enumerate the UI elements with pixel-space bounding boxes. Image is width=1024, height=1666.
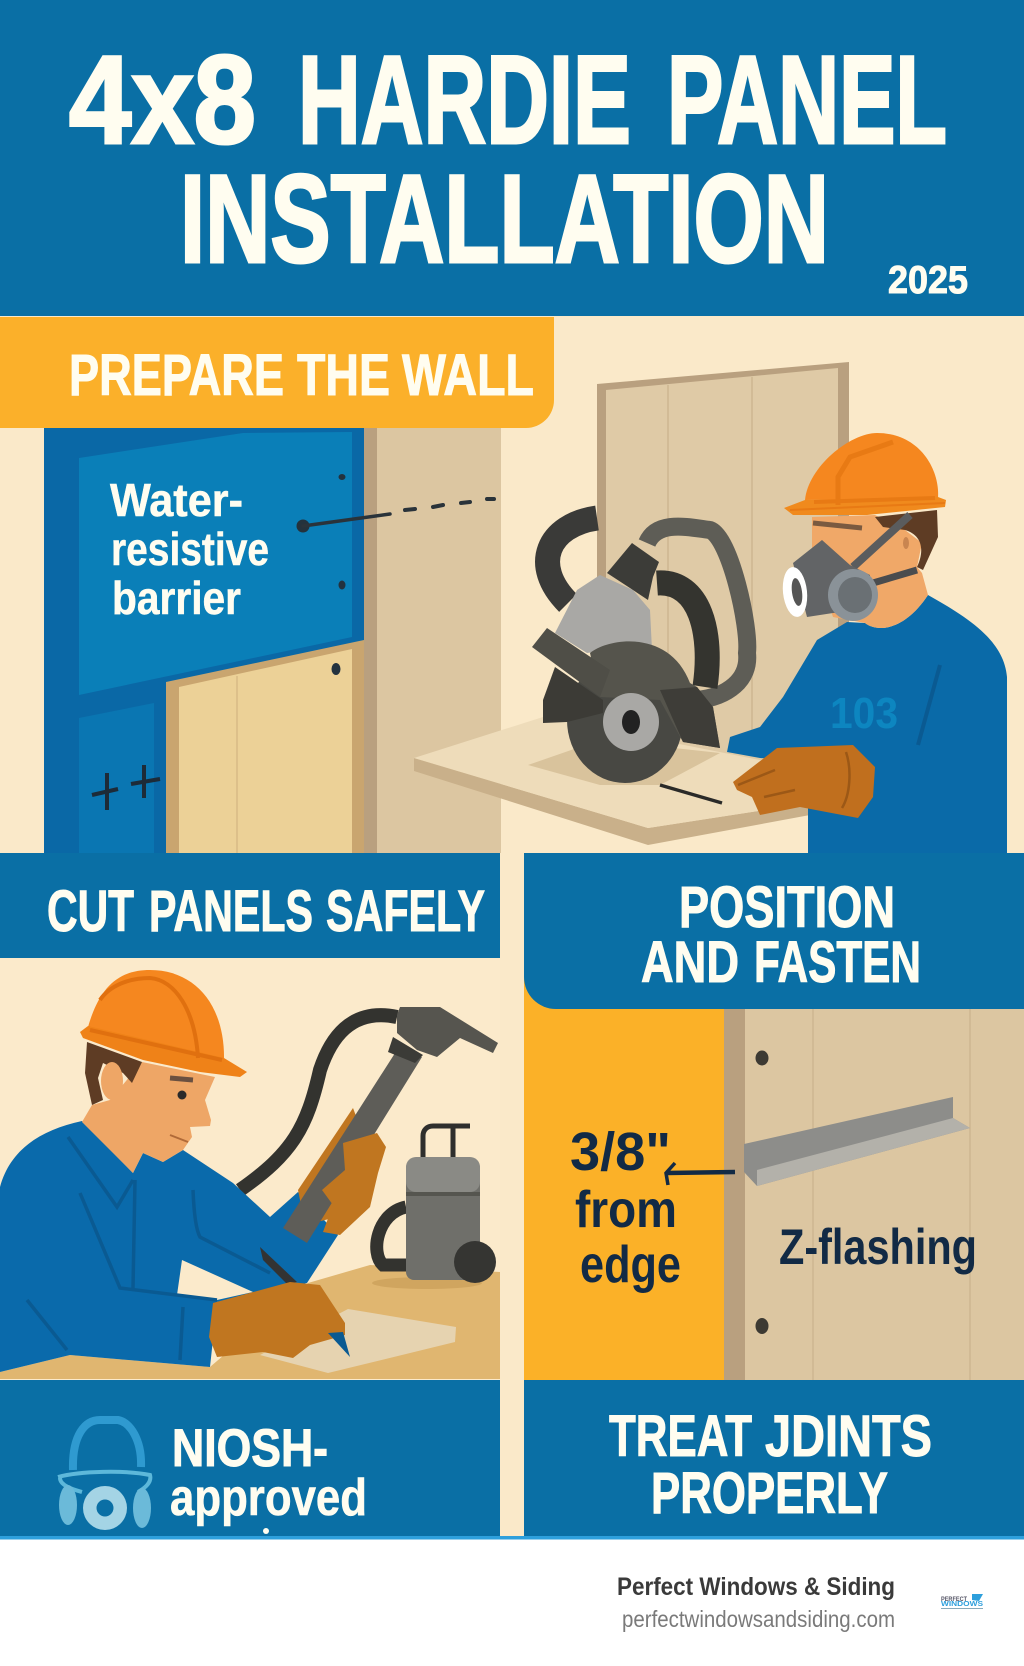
step heading: position and fasten: POSITION (679, 875, 895, 940)
barrier label: barrier (112, 572, 241, 624)
step heading: cut panels safely: SAFELY (326, 879, 485, 944)
step heading: cut panels safely (0, 853, 500, 958)
step heading: cut panels safely: CUT (47, 879, 134, 944)
icon: logo: PERFECT (941, 1597, 967, 1603)
panel: position and fasten illustration (524, 975, 1024, 1380)
step heading: treat joints properly: TREAT (609, 1404, 752, 1469)
footer URL: perfectwindowsandsiding.com (622, 1606, 895, 1632)
barrier label (110, 474, 269, 624)
paper sheet (260, 1309, 456, 1373)
head (82, 1042, 215, 1173)
NIOSH text: NIOSH- (172, 1419, 328, 1478)
panel: worker marking a panel (0, 958, 500, 1380)
worker with respirator (727, 433, 1007, 853)
blue shirt (0, 1121, 338, 1372)
cross marks (92, 765, 160, 810)
glove (733, 745, 875, 818)
icon: logo: WINDOWS (941, 1601, 983, 1608)
icon: orange hard hat (784, 433, 946, 515)
rear glove (298, 1108, 365, 1225)
barrier label: Water- (110, 474, 243, 526)
z-flashing (744, 1097, 970, 1186)
work table (0, 1265, 500, 1379)
title: 4x8 (69, 31, 256, 170)
title (69, 31, 947, 289)
footer (0, 1536, 1024, 1666)
step heading: prepare the wall: PREPARE (69, 343, 284, 408)
icon: logo (941, 1594, 983, 1609)
hose (240, 1015, 397, 1190)
step heading: prepare the wall: WALL (402, 343, 534, 408)
dashed leader line (296, 499, 494, 532)
footer brand name: Perfect Windows & Siding (617, 1573, 895, 1601)
year label: 2025 (888, 259, 968, 302)
step heading: prepare the wall: THE (297, 343, 390, 408)
fastener dots (332, 474, 346, 675)
icon: respirator (58, 1420, 151, 1530)
z-flashing label: Z-flashing (779, 1219, 977, 1275)
barrier label: resistive (111, 523, 269, 575)
step heading: prepare the wall (0, 317, 554, 428)
icon: respirator mask (780, 515, 917, 621)
hammer tool (283, 1007, 498, 1243)
icon: circular saw (532, 518, 747, 783)
table board (414, 717, 810, 845)
NIOSH text (170, 1419, 367, 1534)
edge distance label: edge (580, 1236, 681, 1294)
blue shirt (727, 595, 1007, 853)
edge distance label: 3/8" (570, 1122, 671, 1182)
gripping fist (322, 1133, 386, 1235)
panel: prepare the wall illustration (44, 428, 501, 853)
step heading: cut panels safely: PANELS (149, 879, 313, 944)
step heading: position and fasten: FASTEN (754, 930, 921, 995)
arrow (666, 1163, 735, 1185)
pencil (260, 1247, 297, 1284)
panel: NIOSH respirator (0, 1380, 500, 1536)
writing glove (209, 1282, 345, 1358)
step heading: treat joints properly: JDINTS (765, 1404, 932, 1469)
step heading: position and fasten (524, 853, 1024, 1009)
edge distance label: from (575, 1181, 677, 1239)
step heading: position and fasten: AND (641, 930, 739, 995)
title: HARDIE (298, 31, 631, 170)
fastener holes (756, 1050, 768, 1334)
edge distance label (570, 1122, 681, 1294)
face and neck (812, 515, 928, 628)
worker with respirator: 103 (830, 689, 898, 738)
shop vacuum (372, 1126, 496, 1289)
icon: hard hat (80, 970, 247, 1077)
header band (0, 0, 1024, 316)
NIOSH text: approved (170, 1469, 367, 1527)
panel: cutting illustration (414, 362, 1007, 853)
step heading: treat joints properly (524, 1380, 1024, 1536)
step heading: treat joints properly: PROPERLY (651, 1461, 888, 1526)
